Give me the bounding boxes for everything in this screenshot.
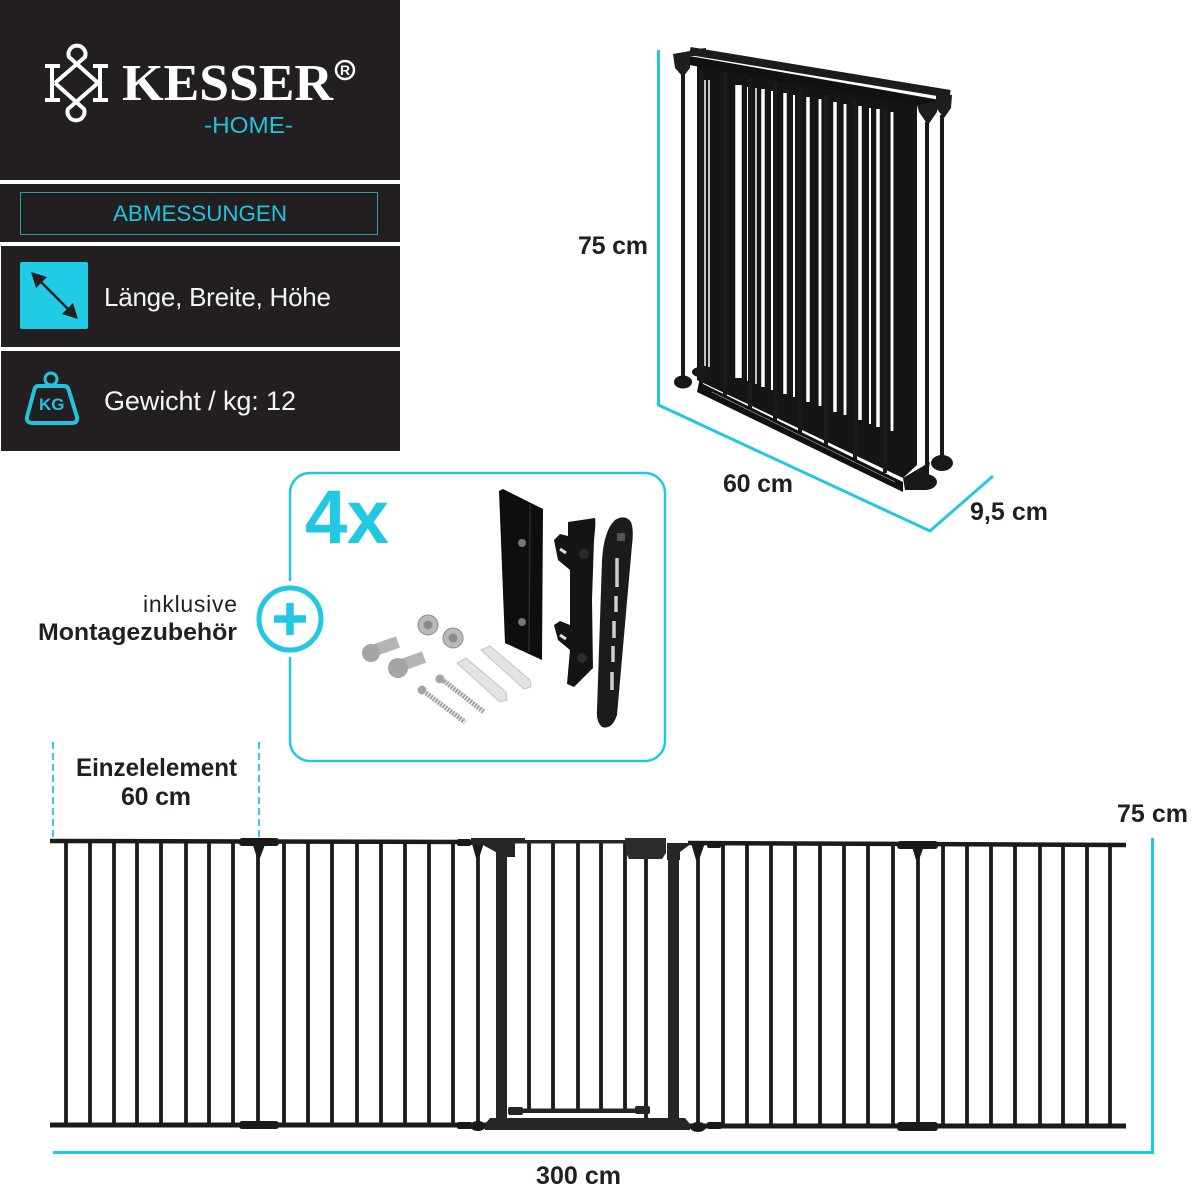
label: width 60 cm: 60 cm — [723, 470, 793, 498]
dimension lines: full fence — [53, 838, 1152, 1152]
label: Montagezubehör: Montagezubehör — [38, 619, 237, 646]
icon: diagonal arrow — [20, 262, 88, 329]
dimension marks: single element — [53, 742, 259, 838]
panel: dimensions legend — [1, 246, 400, 347]
panel: accessories — [290, 473, 665, 761]
panel: logo — [0, 0, 400, 180]
icon: plus circle — [252, 581, 328, 657]
icon: slotted plate — [597, 517, 633, 728]
logo subtitle: -HOME- — [204, 112, 293, 138]
label: 4x: 4x — [305, 475, 389, 560]
label: 300 cm: 300 cm — [536, 1162, 621, 1190]
icon: machine screws — [362, 642, 424, 678]
registered mark — [336, 61, 354, 79]
icon: wall anchors — [457, 646, 531, 702]
label: depth 9,5 cm: 9,5 cm — [970, 498, 1048, 526]
panel: weight — [1, 351, 400, 451]
dimension lines: folded fence — [658, 50, 993, 531]
label: Einzelelement 60 cm: Einzelelement — [76, 754, 238, 782]
icon: hook bracket — [554, 518, 595, 687]
gate — [471, 838, 692, 1130]
icon: wood screws — [418, 674, 484, 722]
heading: Abmessungen: ABMESSUNGEN — [113, 201, 287, 226]
icon: weight — [27, 373, 77, 423]
icon: long bracket — [499, 489, 543, 660]
weight text: Gewicht / kg: 12 — [104, 386, 296, 416]
label: fence height 75 cm: 75 cm — [1117, 800, 1188, 828]
logo wordmark: KESSER — [122, 55, 334, 112]
label: height 75 cm: 75 cm — [578, 232, 648, 260]
panel: heading — [0, 184, 400, 242]
label: Einzelelement 60 cm: 60 cm — [121, 783, 191, 811]
label: inklusive: inklusive — [143, 591, 237, 617]
label: Einzelelement 60 cm — [76, 754, 238, 811]
fence connectors — [239, 838, 938, 1132]
icon: weight: KG — [39, 395, 64, 414]
icon: logo mark — [45, 46, 108, 120]
registered mark: R — [340, 62, 350, 78]
legend text: Länge, Breite, Höhe — [104, 282, 331, 312]
full fence with gate — [50, 838, 1126, 1132]
folded fence product — [673, 48, 953, 492]
icon: nuts — [418, 615, 463, 648]
